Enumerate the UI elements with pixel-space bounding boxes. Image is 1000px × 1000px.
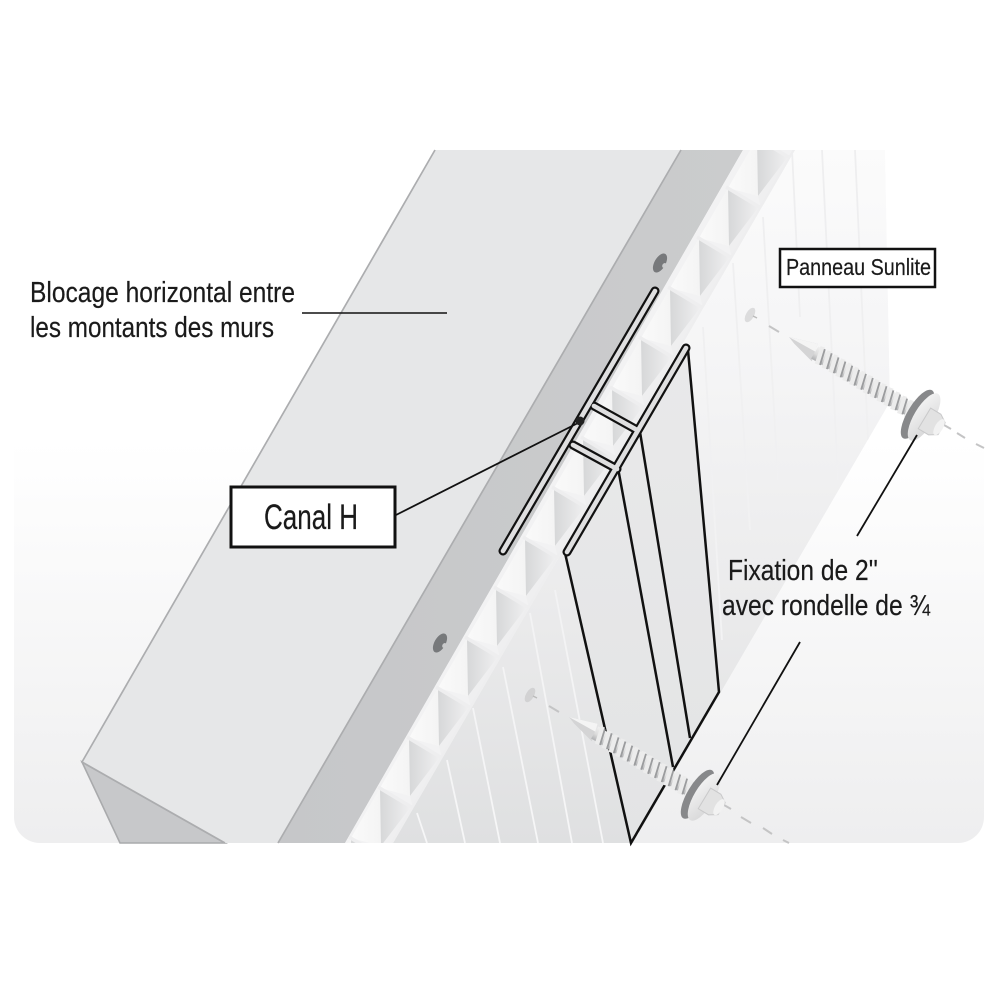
lower pilot hole	[523, 686, 537, 704]
leader: Canal H	[396, 422, 580, 515]
label: Panneau Sunlite: Panneau Sunlite	[786, 254, 931, 280]
upper screw with pilot hole and axis	[743, 306, 984, 453]
label: Canal H	[231, 487, 395, 547]
leader: blocking	[302, 312, 447, 314]
fastener dimension line lower	[717, 642, 800, 785]
upper screw hole	[650, 251, 671, 276]
label: blocking	[30, 277, 295, 344]
lower screw hole	[430, 631, 451, 656]
fastener dimension line upper	[857, 435, 917, 536]
upper pilot hole	[743, 306, 757, 324]
label: Panneau Sunlite	[780, 249, 935, 287]
beam side band	[278, 150, 743, 843]
upper screw	[775, 313, 957, 453]
label: blocking: Blocage horizontal entre	[30, 277, 295, 309]
corrugated panel edge	[345, 150, 795, 843]
beam end face	[82, 762, 225, 843]
wall blocking beam	[82, 150, 743, 843]
label: fastener	[722, 555, 931, 622]
leader dot	[576, 416, 584, 426]
lower screw	[555, 693, 737, 833]
label: fastener: avec rondelle de ¾	[722, 590, 931, 622]
Sunlite panel sheet with ribs	[393, 150, 890, 843]
label: fastener: Fixation de 2''	[728, 555, 878, 587]
label: blocking: les montants des murs	[30, 312, 274, 344]
upper axis dashes	[769, 326, 984, 448]
label: Canal H: Canal H	[264, 498, 358, 537]
beam top face	[82, 150, 681, 843]
lower screw with pilot hole and axis	[523, 686, 789, 843]
background panel	[14, 150, 984, 843]
inserted panel section	[566, 350, 719, 843]
inserted panel outlines	[565, 350, 719, 843]
H channel	[503, 291, 686, 552]
lower axis dashes	[549, 706, 789, 843]
beam edge lines	[82, 150, 681, 843]
